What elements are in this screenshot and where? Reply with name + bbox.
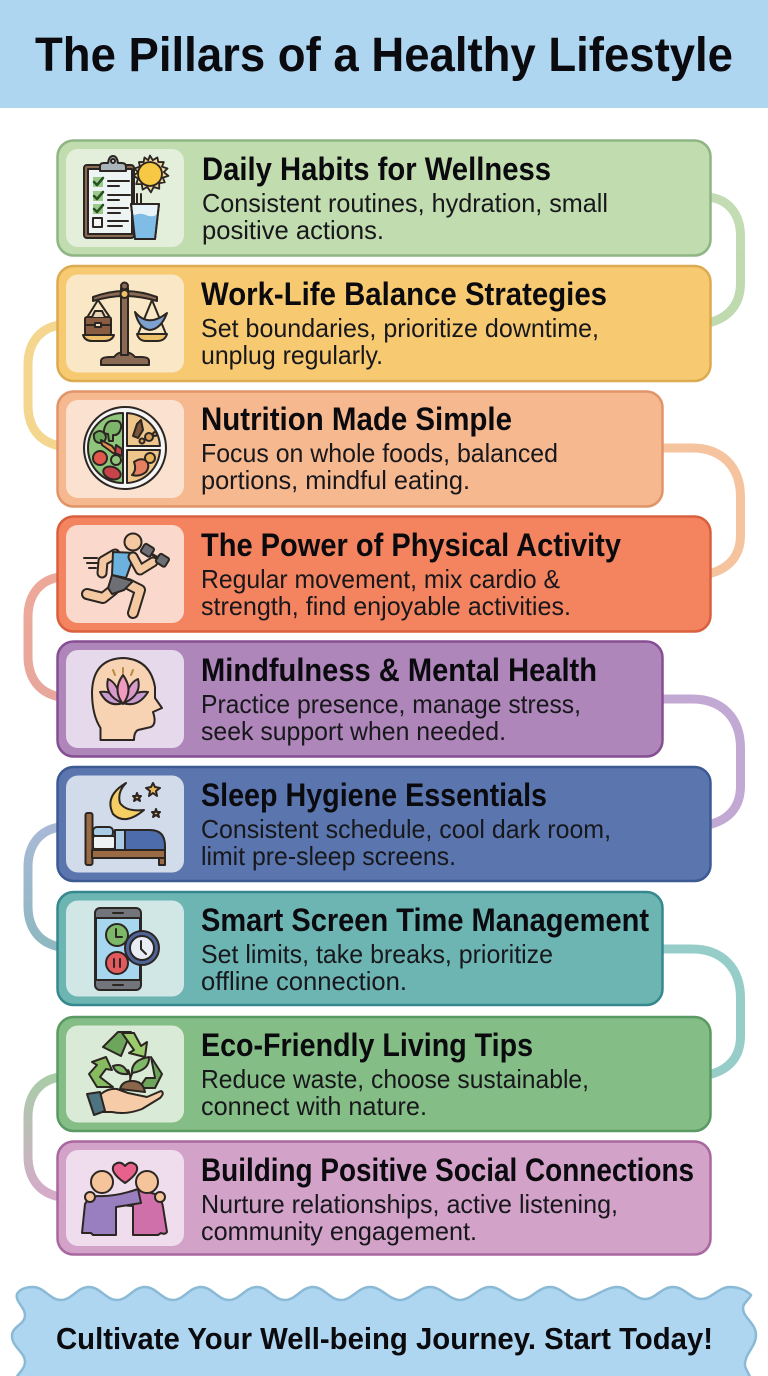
heading: Nutrition Made Simple [201, 401, 512, 437]
heading: Eco-Friendly Living Tips [201, 1027, 533, 1063]
call to action: Cultivate Your Well-being Journey. Start Today! [56, 1321, 713, 1356]
icon: head with lotus [92, 658, 162, 740]
description: Consistent schedule, cool dark room, [201, 814, 611, 844]
title: The Pillars of a Healthy Lifestyle [35, 29, 733, 82]
connector: mindfulness to sleep [660, 699, 740, 825]
heading: Work-Life Balance Strategies [201, 276, 607, 312]
heading: Mindfulness & Mental Health [201, 652, 597, 688]
description: unplug regularly. [201, 340, 383, 370]
description [201, 814, 611, 871]
description [201, 313, 599, 370]
icon: runner with dumbbell [84, 534, 170, 613]
description: connect with nature. [201, 1091, 427, 1121]
footer banner [12, 1287, 756, 1376]
description: Reduce waste, choose sustainable, [201, 1064, 589, 1094]
panel: screen time [58, 892, 662, 1005]
panel: eco living [58, 1017, 710, 1131]
heading: Building Positive Social Connections [201, 1152, 694, 1188]
panel: nutrition [58, 392, 662, 506]
connector: eco living to social connections [28, 1077, 60, 1197]
description: Consistent routines, hydration, small [202, 188, 608, 218]
connector: work-life balance to nutrition [28, 325, 60, 446]
description: Set limits, take breaks, prioritize [201, 939, 553, 969]
connector: daily habits to work-life balance [708, 197, 740, 323]
description: community engagement. [201, 1216, 477, 1246]
description: strength, find enjoyable activities. [201, 591, 571, 621]
description: Nurture relationships, active listening, [201, 1189, 618, 1219]
icon: clipboard, sun and water [84, 156, 168, 239]
panel: social connections [58, 1142, 710, 1254]
connector: sleep to screen time [28, 827, 60, 947]
description: limit pre-sleep screens. [201, 841, 456, 871]
description: seek support when needed. [201, 716, 506, 746]
icon: two friends with heart [82, 1163, 167, 1235]
panel: daily habits [58, 140, 710, 256]
panel: mindfulness [58, 642, 662, 756]
panel: work-life balance [58, 266, 710, 381]
description [201, 1189, 618, 1246]
description: positive actions. [202, 215, 384, 245]
connector: nutrition to physical activity [660, 448, 740, 574]
description [202, 188, 608, 245]
description [201, 438, 558, 495]
panel: physical activity [58, 516, 710, 632]
heading: Daily Habits for Wellness [202, 151, 551, 187]
description [201, 689, 581, 746]
description [201, 1064, 589, 1121]
description: offline connection. [201, 966, 407, 996]
description [201, 564, 571, 621]
panel: sleep hygiene [58, 767, 710, 881]
description: Practice presence, manage stress, [201, 689, 581, 719]
icon: divided plate [84, 407, 166, 489]
description: Set boundaries, prioritize downtime, [201, 313, 599, 343]
heading: The Power of Physical Activity [201, 527, 621, 563]
description [201, 939, 553, 996]
icon: phone with clock [95, 908, 159, 990]
header band [0, 0, 768, 108]
description: Focus on whole foods, balanced [201, 438, 558, 468]
description: Regular movement, mix cardio & [201, 564, 560, 594]
connector: physical activity to mindfulness [28, 577, 60, 697]
connector: screen time to eco living [660, 949, 740, 1075]
icon: balance scales [83, 282, 167, 365]
description: portions, mindful eating. [201, 465, 470, 495]
icon: bed with moon and stars [86, 783, 165, 865]
heading: Sleep Hygiene Essentials [201, 777, 547, 813]
icon: recycling and hand with sprout [87, 1032, 163, 1115]
heading: Smart Screen Time Management [201, 902, 649, 938]
